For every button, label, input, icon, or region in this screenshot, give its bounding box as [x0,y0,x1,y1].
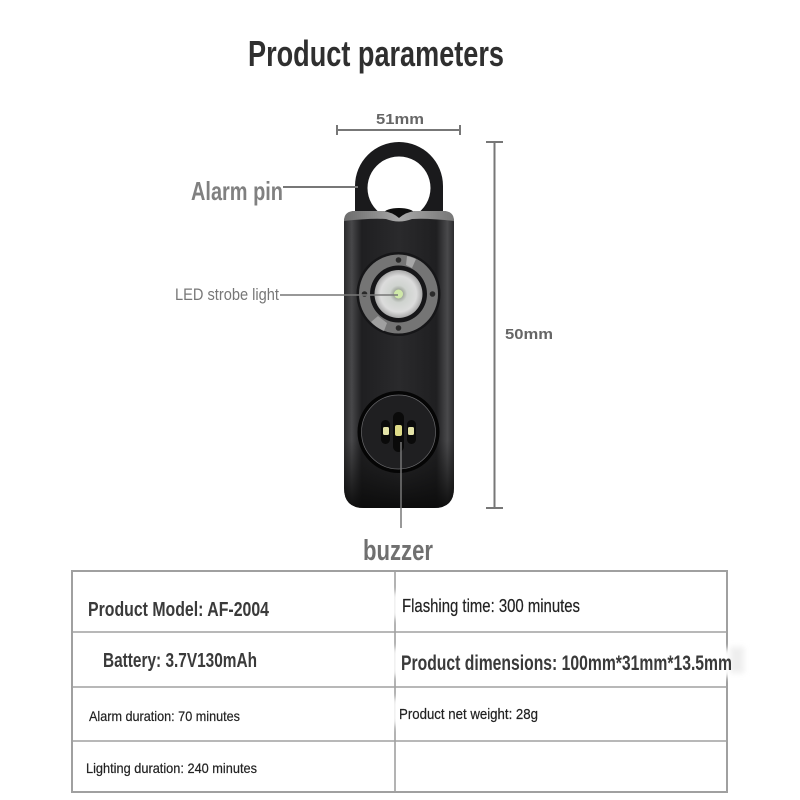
text halo patches [392,592,744,728]
dimension: width 51mm: 51mm [376,111,424,128]
cell: alarm duration: Alarm duration: 70 minutes [89,708,240,724]
cell: lighting duration: Lighting duration: 240 minutes [86,760,257,776]
LED strobe lens [356,252,440,336]
parameters table [72,571,744,792]
shackle base bump [384,208,414,218]
body bottom shading [344,440,454,508]
title: Product parameters [248,33,504,74]
device body [344,211,454,508]
cell: product model: Product Model: AF-2004 [88,599,270,621]
dimension: height 50mm: 50mm [505,326,553,343]
label: buzzer: buzzer [363,535,433,567]
cell: net weight: Product net weight: 28g [399,706,538,723]
dimension: height 50mm [486,142,553,508]
label: buzzer [363,442,433,567]
metal cap stripe [344,211,454,222]
cell: battery: Battery: 3.7V130mAh [103,650,257,672]
buzzer with LED contacts [358,391,440,473]
dimension: width 51mm [337,111,460,135]
cell: flashing time: Flashing time: 300 minutes [402,596,580,616]
label: LED strobe light: LED strobe light [175,285,279,304]
product: alarm device [344,142,454,508]
alarm pin shackle [355,142,443,219]
label: alarm pin: Alarm pin [191,176,283,206]
